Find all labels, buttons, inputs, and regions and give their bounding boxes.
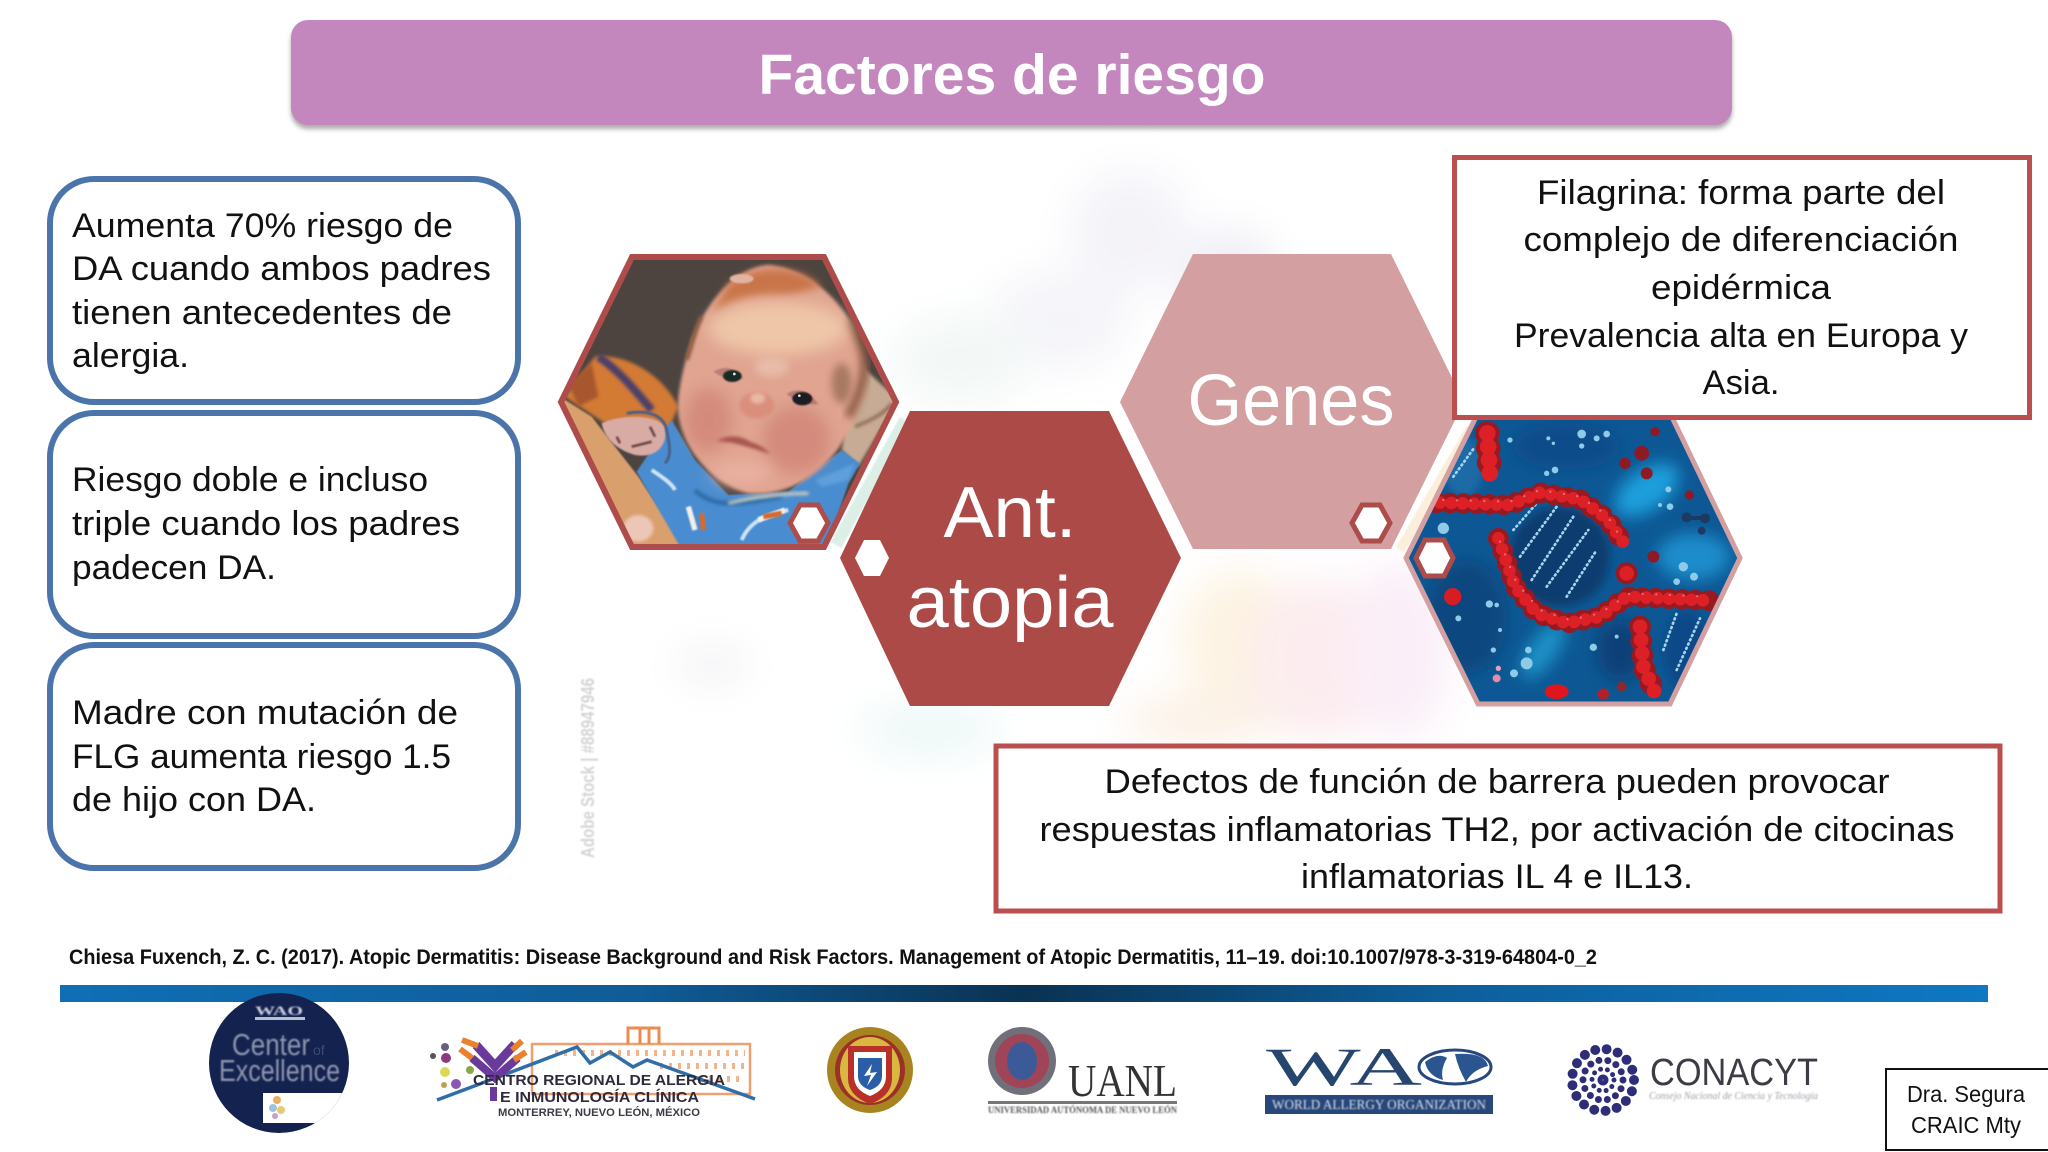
logo: CONACYT: Consejo Nacional de Ciencia y Tecnología	[1649, 1091, 1818, 1102]
logo: UANL: UNIVERSIDAD AUTÓNOMA DE NUEVO LEÓN	[988, 1104, 1177, 1116]
tan strap	[560, 397, 683, 545]
blue garment	[637, 420, 860, 547]
callout: barrier defects: inflamatorias IL 4 e IL13.	[1301, 858, 1693, 896]
badge	[1416, 540, 1453, 576]
callout: filagrina	[1454, 158, 2030, 418]
hexagon: Ant. atopia: atopia	[906, 563, 1115, 643]
hand	[602, 417, 666, 456]
panel: risk box 3: FLG aumenta riesgo 1.5	[72, 738, 451, 776]
mouth	[717, 436, 770, 454]
logo: UANL: UANL	[1068, 1055, 1177, 1106]
callout: filagrina: Asia.	[1702, 364, 1780, 402]
panel: risk box 3	[50, 645, 518, 868]
rungs	[1453, 447, 1700, 670]
author box	[1886, 1069, 2048, 1150]
panel: risk box 1	[50, 179, 518, 402]
logo: Center of Excellence: Center	[232, 1027, 310, 1062]
logo: Centro Regional de Alergia: E INMUNOLOGÍA CLÍNICA	[500, 1089, 699, 1106]
image: baby with eczema	[555, 250, 905, 550]
logo: Centro Regional de Alergia	[430, 1028, 755, 1119]
callout: filagrina: epidérmica	[1651, 269, 1831, 307]
orange cloth	[565, 356, 678, 430]
logo: WAO: WORLD ALLERGY ORGANIZATION	[1272, 1098, 1486, 1113]
logo: CONACYT: CONACYT	[1650, 1052, 1818, 1094]
panel: risk box 3: Madre con mutación de	[72, 694, 458, 732]
watermark: Adobe Stock | #88947946	[578, 678, 598, 858]
callout: filagrina: complejo de diferenciación	[1524, 221, 1958, 259]
panel: risk box 1: DA cuando ambos padres	[72, 250, 491, 288]
hexagon: Ant. atopia: Ant.	[944, 473, 1076, 553]
logo: WAO: WA	[1266, 1037, 1422, 1097]
nose	[739, 392, 774, 419]
eyes	[713, 368, 743, 380]
panel: risk box 2: triple cuando los padres	[72, 505, 460, 543]
logo: Center of Excellence: of	[313, 1042, 325, 1058]
citation: Chiesa Fuxench, Z. C. (2017). Atopic Dermatitis: Disease Background and Risk Factors. Management of Atopic Dermatitis, 11–19. doi:10.1007/978-3-319-64804-0_2	[69, 946, 1597, 969]
logo: CONACYT	[1572, 1049, 1818, 1111]
image: DNA helix	[1400, 410, 1745, 710]
head	[678, 265, 866, 494]
panel: risk box 2: Riesgo doble e incluso	[72, 461, 428, 499]
hexagon: Genes: Genes	[1188, 361, 1394, 441]
hexagon: Genes	[1120, 254, 1464, 549]
logo: Center of Excellence	[209, 993, 349, 1133]
callout: barrier defects: Defectos de función de barrera pueden provocar	[1104, 763, 1890, 801]
logo: Center of Excellence: WAO	[255, 1003, 303, 1018]
badge	[1352, 505, 1390, 541]
author box: CRAIC Mty	[1911, 1112, 2021, 1138]
callout: filagrina: Filagrina: forma parte del	[1537, 174, 1945, 212]
logo: WAO	[1265, 1037, 1493, 1114]
highlights	[1443, 490, 1710, 620]
hexagon: Ant. atopia	[840, 411, 1181, 706]
dark molecule	[1682, 512, 1710, 535]
logo: Centro Regional de Alergia: CENTRO REGIONAL DE ALERGIA	[473, 1072, 725, 1089]
arm at right	[840, 369, 893, 468]
panel: risk box 1: alergia.	[72, 337, 189, 375]
particles	[1438, 430, 1698, 677]
panel: risk box 3: de hijo con DA.	[72, 781, 316, 819]
badge	[855, 540, 889, 576]
callout: barrier defects	[996, 746, 2000, 911]
hair	[712, 269, 822, 313]
callout: barrier defects: respuestas inflamatorias TH2, por activación de citocinas	[1040, 811, 1954, 849]
ring interior	[1510, 507, 1610, 607]
watercolor background	[674, 170, 1471, 755]
panel: risk box 1: Aumenta 70% riesgo de	[72, 207, 453, 245]
glows	[1605, 453, 1688, 527]
logo: Center of Excellence: Excellence	[219, 1053, 340, 1088]
author box: Dra. Segura	[1907, 1081, 2025, 1107]
globe	[1419, 1050, 1491, 1084]
loose red atoms	[1444, 588, 1461, 605]
footer gradient bar	[60, 985, 1988, 1002]
callout: filagrina: Prevalencia alta en Europa y	[1514, 317, 1968, 355]
logo: UANL	[988, 1027, 1177, 1116]
logo: Centro Regional de Alergia: MONTERREY, NUEVO LEÓN, MÉXICO	[498, 1106, 700, 1119]
blotches	[685, 388, 732, 452]
panel: risk box 2	[50, 413, 518, 636]
panel: risk box 2: padecen DA.	[72, 549, 276, 587]
panel: risk box 1: tienen antecedentes de	[72, 294, 452, 332]
title banner	[291, 20, 1732, 125]
forehead highlight	[708, 302, 848, 355]
helix beads red layer	[1440, 433, 1710, 697]
helix beads dark layer	[1437, 433, 1710, 697]
badge	[790, 505, 828, 541]
title: Factores de riesgo	[758, 43, 1266, 107]
logo: shield crest	[827, 1027, 913, 1113]
